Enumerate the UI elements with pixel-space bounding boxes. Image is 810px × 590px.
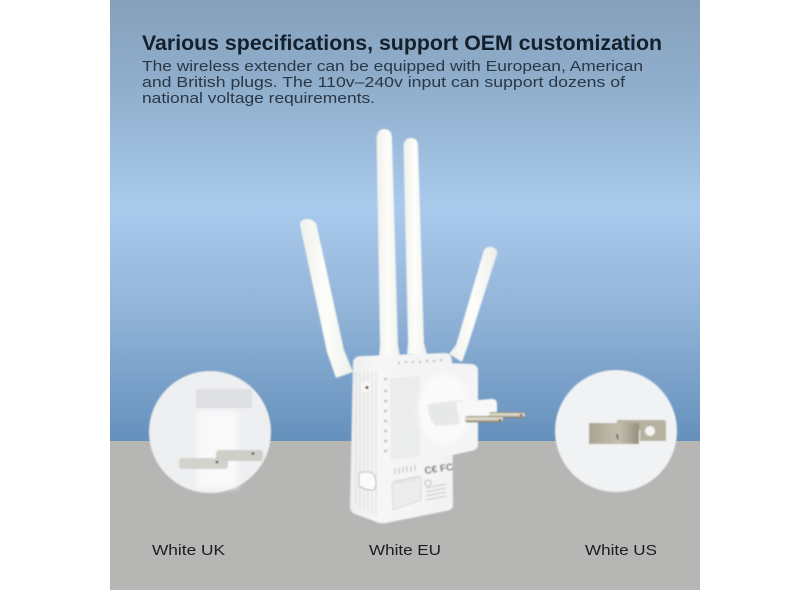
device recess panel [390,376,420,460]
icon: UK plug circle [149,371,271,493]
text block: description: and British plugs. The 110v–240v input can support dozens of [142,74,626,91]
label: White UK: White UK [152,542,225,559]
device side ribs [356,372,376,516]
antenna hinge [360,382,372,392]
label: White US: White US [585,542,657,559]
device label and certification marks: C€ FC [424,462,454,477]
EU plug pins [489,412,525,418]
EU plug cap [456,399,497,425]
icon: wireless extender with EU plug [300,129,525,523]
device body [350,353,453,523]
EU plug neck [428,400,470,426]
device label and certification marks [392,462,454,510]
title: Various specifications, support OEM customization [142,32,662,55]
device side switch [359,472,376,490]
US plug front blade [589,423,639,444]
antenna: centre right [404,138,427,354]
icon: US plug circle [555,370,677,492]
panel: grey floor [110,441,700,590]
EU plug face [420,362,478,461]
text block: description [142,58,643,107]
antenna: right [449,247,497,362]
UK earth pin [196,389,252,408]
US plug rear blade [617,420,666,441]
UK plug vertical highlights [197,412,238,488]
text block: description: national voltage requirements. [142,90,375,107]
panel: blue studio background [110,0,700,442]
UK live pin [179,458,228,469]
EU plug round socket shade [418,374,470,446]
US plug blade hole [645,426,655,436]
antenna: centre left [376,129,400,356]
device status lights [384,359,442,452]
UK neutral pin [216,450,263,461]
antenna: far left [300,219,353,378]
label: White EU: White EU [369,542,441,559]
text block: description: The wireless extender can be equipped with European, American [142,58,643,75]
